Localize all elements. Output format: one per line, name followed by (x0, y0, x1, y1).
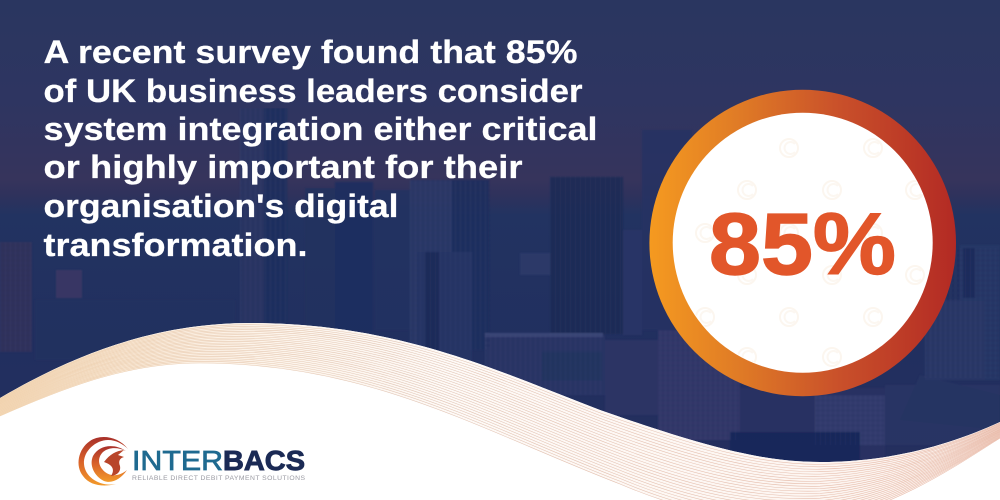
wave contour lines (0, 325, 1000, 500)
icon: phoenix swoosh (79, 437, 128, 485)
headline text: transformation. (44, 227, 308, 263)
headline text: of UK business leaders consider (44, 73, 583, 109)
white wave footer (0, 323, 1000, 500)
stat circle (649, 90, 956, 396)
gradient ring (649, 90, 956, 396)
wordmark: INTER (132, 445, 223, 476)
Interbacs logo: BACS (223, 445, 305, 476)
headline text: organisation's digital (44, 188, 399, 224)
headline text: system integration either critical (44, 111, 598, 147)
wave band tint (0, 323, 1000, 500)
85% figure: 85% (709, 196, 896, 293)
white disc (673, 113, 933, 373)
headline text (44, 34, 598, 263)
headline text: or highly important for their (44, 149, 523, 185)
tagline: RELIABLE DIRECT DEBIT PAYMENT SOLUTIONS (132, 475, 305, 482)
headline text: A recent survey found that 85% (44, 34, 578, 70)
watermark logos (696, 139, 924, 366)
Interbacs logo (79, 437, 305, 485)
city skyline photo (0, 108, 1000, 462)
